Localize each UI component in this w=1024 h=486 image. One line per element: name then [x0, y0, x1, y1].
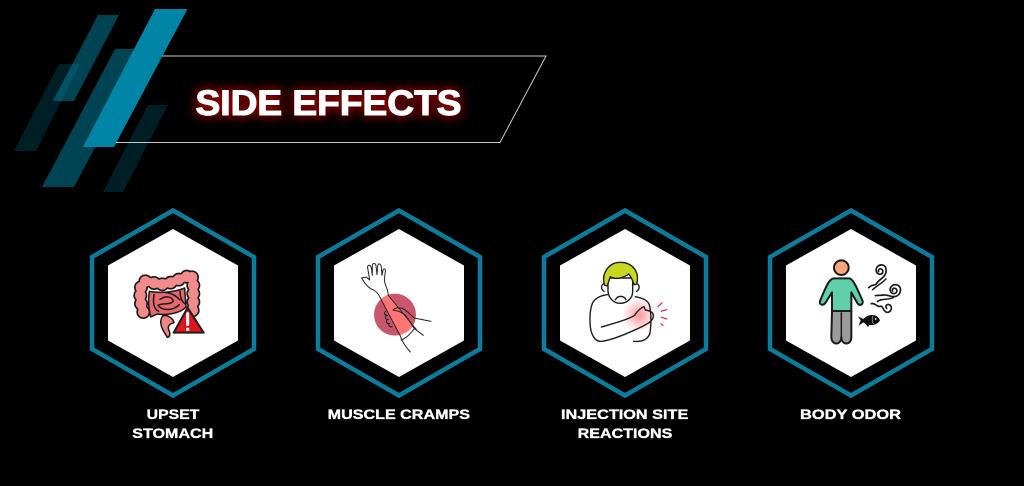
hexagon frame — [544, 210, 706, 396]
icon: intestines with warning — [133, 270, 204, 337]
label: REACTIONS — [578, 425, 672, 441]
hexagon frame — [92, 210, 254, 396]
label: BODY ODOR — [800, 406, 901, 422]
panel: upset stomach — [92, 210, 254, 441]
hexagon white — [786, 229, 916, 377]
hexagon frame — [318, 210, 480, 396]
hexagon white — [334, 229, 464, 377]
label: STOMACH — [132, 425, 213, 441]
panel: body odor — [770, 210, 932, 422]
icon: person with odor and fish — [820, 260, 900, 343]
hexagon frame — [770, 210, 932, 396]
label — [132, 406, 213, 441]
hexagon white — [108, 229, 238, 377]
label: UPSET — [147, 406, 200, 422]
decorative slanted bars — [14, 9, 188, 192]
panel: injection site reactions — [544, 210, 706, 441]
icon: arm cramp — [362, 263, 431, 352]
title: SIDE EFFECTS — [196, 83, 462, 123]
panel: muscle cramps — [318, 210, 480, 422]
hexagon white — [560, 229, 690, 377]
title frame — [116, 56, 546, 142]
label: MUSCLE CRAMPS — [328, 406, 470, 422]
label: INJECTION SITE — [561, 406, 688, 422]
label — [561, 406, 688, 441]
icon: person holding sore arm — [590, 262, 667, 341]
